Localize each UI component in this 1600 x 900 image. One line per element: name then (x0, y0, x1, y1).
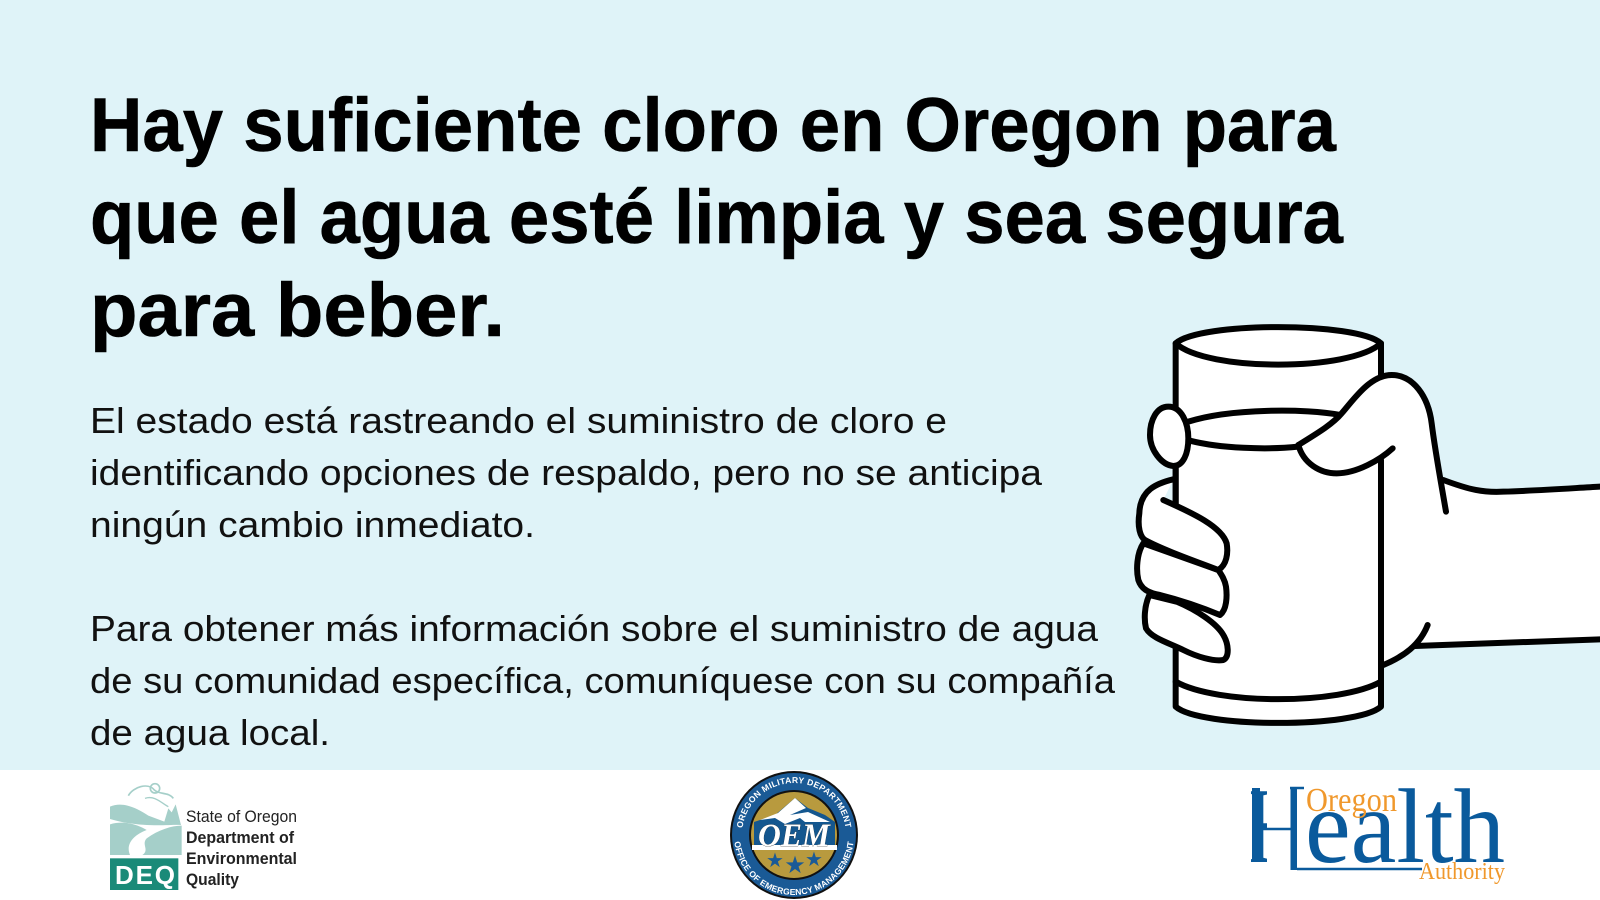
text block: more information: de su comunidad específica, comuníquese con su compañía (90, 660, 1116, 701)
title: Hay suficiente cloro en Oregon para (90, 83, 1337, 168)
logo text: state of oregon department (186, 808, 297, 889)
logo: Oregon Health Authority: ealth (1305, 768, 1505, 885)
logo text: state of oregon department: Quality (186, 871, 240, 889)
title: que el agua esté limpia y sea segura (90, 175, 1344, 260)
seal bottom lettering: OFFICE OF EMERGENCY MANAGEMENT (734, 841, 854, 895)
text block: state tracking: El estado está rastreando el suministro de cloro e (90, 400, 947, 441)
logo: Oregon Health Authority (1251, 786, 1505, 884)
logo: Oregon Office of Emergency Management seal (730, 771, 858, 899)
seal stars: ★ (784, 851, 806, 879)
seal stars (766, 847, 823, 879)
seal OEM wordmark: OEM (758, 818, 832, 854)
text block: state tracking: ningún cambio inmediato. (90, 504, 535, 545)
logo: Oregon Health Authority: H (1249, 767, 1299, 886)
seal top lettering: OREGON MILITARY DEPARTMENT (737, 777, 852, 828)
icon: hand holding glass of water (1137, 327, 1600, 723)
text block: more information: de agua local. (90, 712, 330, 753)
text block: state tracking: identificando opciones de respaldo, pero no se anticipa (90, 452, 1043, 493)
logo text: state of oregon department: State of Oregon (186, 808, 297, 826)
logo text: state of oregon department: Department of (186, 829, 294, 847)
title (90, 83, 1344, 353)
text block: state tracking (90, 400, 1043, 545)
logo text: state of oregon department: Environmental (186, 850, 297, 868)
seal stars: ★ (805, 847, 823, 871)
text block: more information: Para obtener más información sobre el suministro de agua (90, 608, 1099, 649)
OHA Authority wordmark: Authority (1419, 859, 1505, 885)
title: para beber. (90, 268, 505, 353)
OHA Oregon wordmark: Oregon (1306, 782, 1397, 819)
seal stars: ★ (766, 848, 784, 872)
DEQ wordmark: DEQ (115, 860, 175, 890)
text block: more information (90, 608, 1116, 753)
logo: Oregon DEQ (110, 784, 297, 890)
